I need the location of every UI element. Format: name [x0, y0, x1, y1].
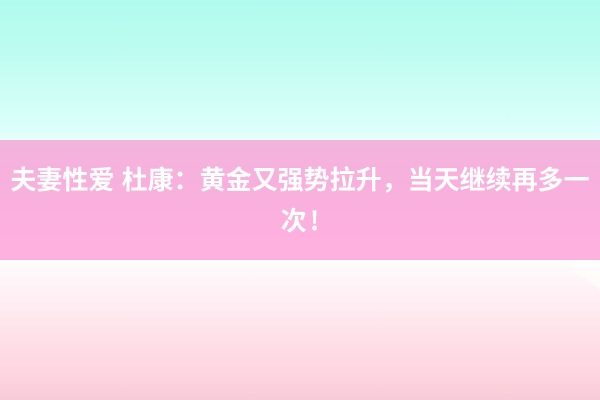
panel: title band: [0, 140, 600, 260]
title: 夫妻性爱 杜康：黄金又强势拉升，当天继续再多一次!: [10, 165, 590, 238]
